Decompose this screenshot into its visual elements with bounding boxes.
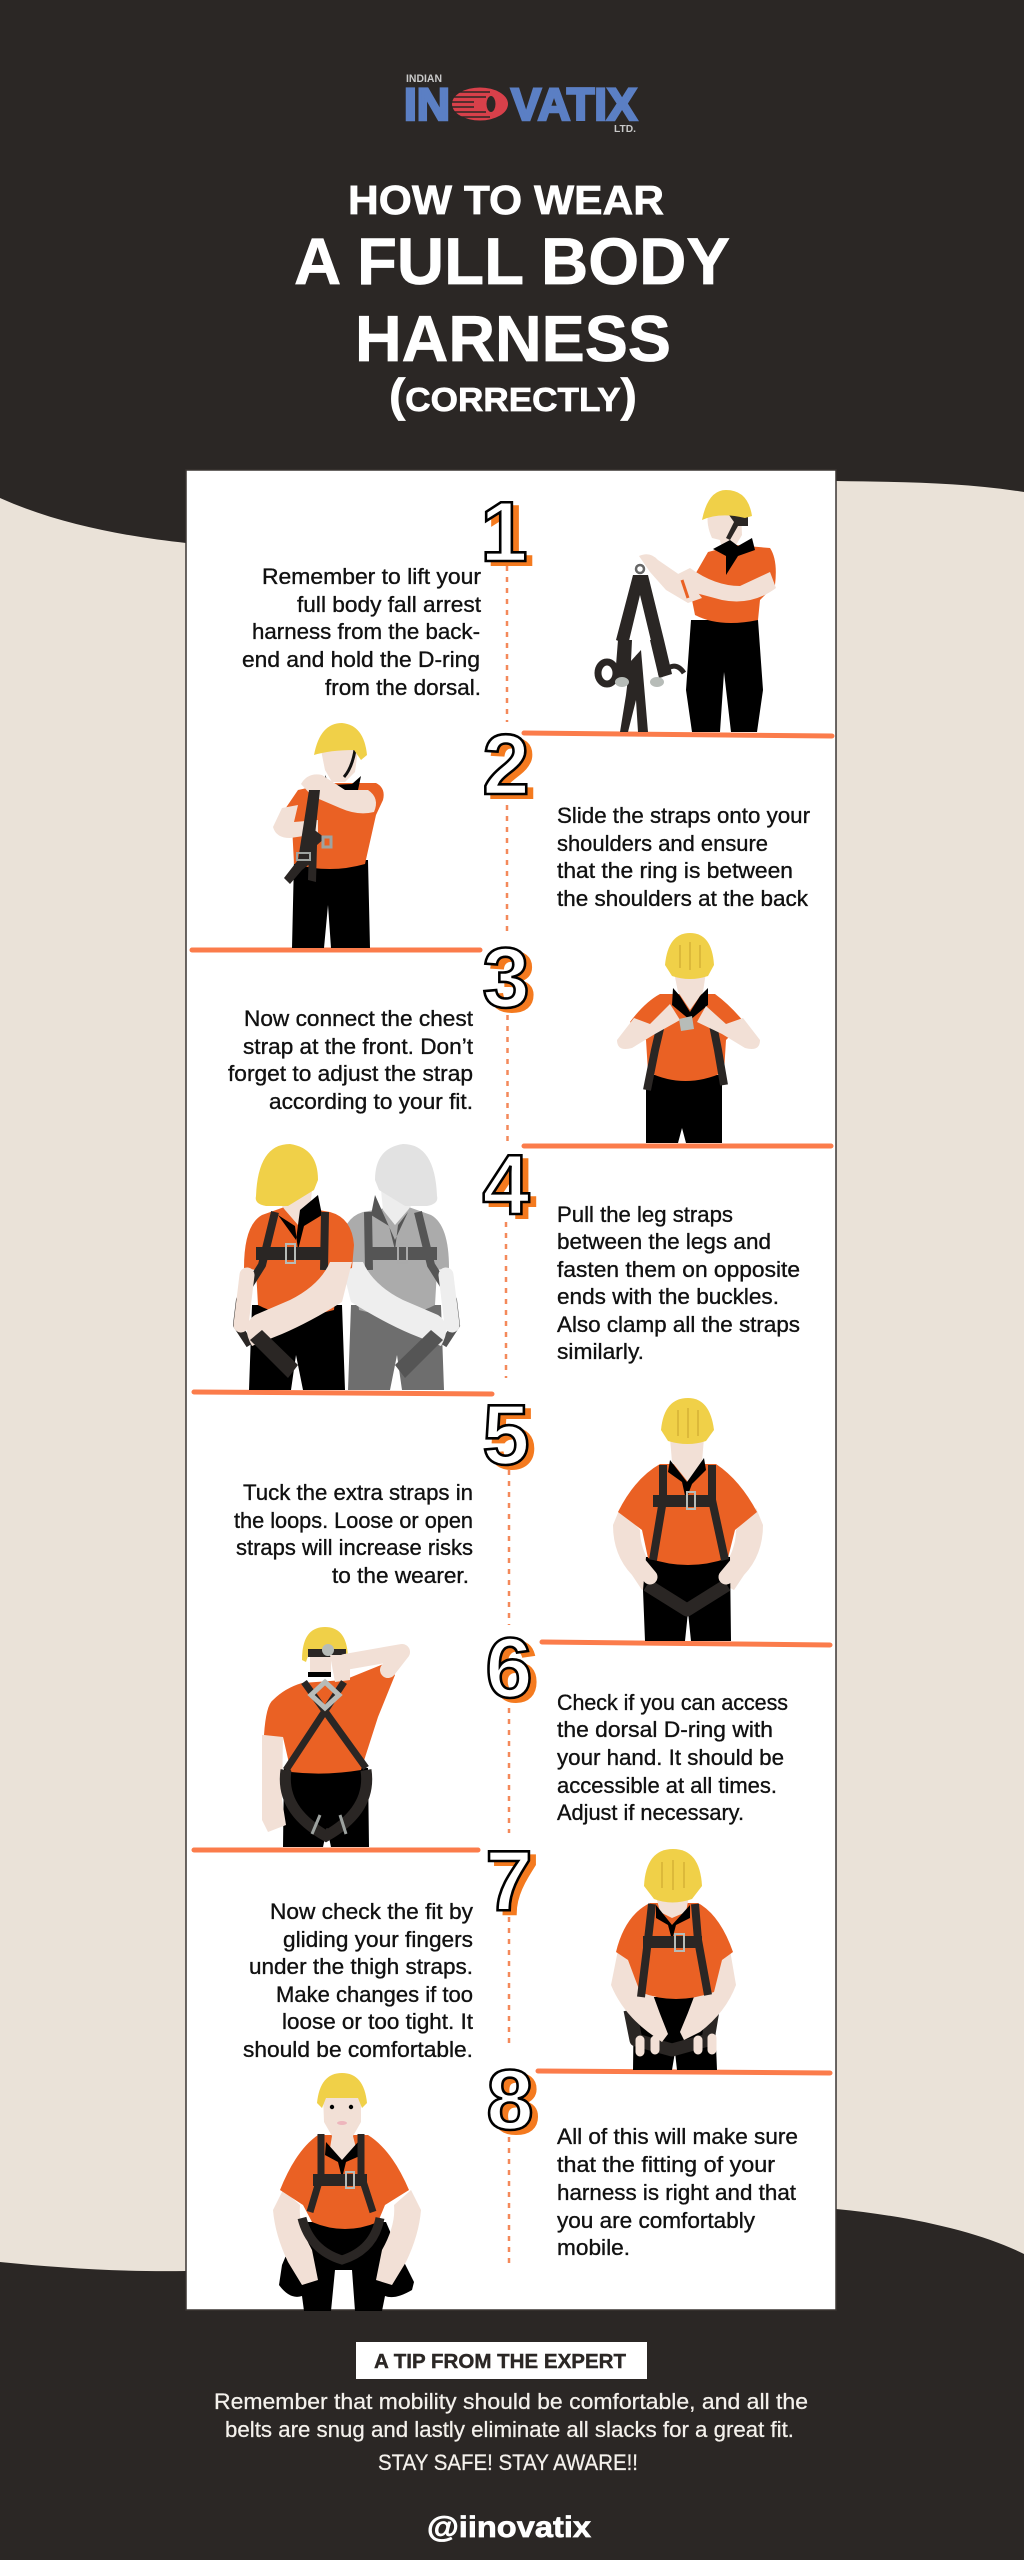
step 4 text: ends with the buckles. — [557, 1284, 779, 1309]
step 2 text: that the ring is between — [557, 858, 793, 883]
step 4 text: between the legs and — [557, 1229, 771, 1254]
title: HARNESS — [355, 302, 671, 375]
step 4 text: similarly. — [557, 1339, 644, 1364]
dividers: orange lines and dotted centre line — [192, 566, 832, 2263]
step 5 text: straps will increase risks — [236, 1535, 473, 1560]
step 5 figure: worker tucking straps — [613, 1398, 763, 1641]
title — [294, 177, 730, 421]
step 6 number: 6 — [485, 1621, 533, 1716]
step 2 text: the shoulders at the back — [557, 886, 809, 911]
step 7 text: under the thigh straps. — [249, 1954, 473, 1979]
step 8 number: 8 — [492, 2057, 540, 2152]
step 7 number: 7 — [485, 1834, 533, 1929]
step 4 text: fasten them on opposite — [557, 1257, 800, 1282]
step 8 text — [557, 2124, 798, 2260]
step 6 text — [557, 1690, 788, 1825]
step 5 text: the loops. Loose or open — [234, 1508, 473, 1533]
step 6 figure: worker reaching dorsal D-ring, back view — [262, 1627, 402, 1847]
step 3 text: forget to adjust the strap — [228, 1061, 473, 1086]
step 5 text: Tuck the extra straps in — [243, 1480, 473, 1505]
step 1 figure: worker lifting harness — [598, 490, 776, 732]
step 2 number: 2 — [488, 722, 536, 817]
tip text: STAY SAFE! STAY AWARE!! — [378, 2450, 638, 2475]
logo: Indian Inovatix Ltd: IN — [404, 79, 450, 130]
step 7 text: Now check the fit by — [270, 1899, 473, 1924]
step 3 number: 3 — [482, 931, 530, 1026]
step 7 number: 7 — [491, 1838, 539, 1933]
title: A FULL BODY — [294, 224, 730, 298]
step 8 text: you are comfortably — [557, 2208, 755, 2233]
title: (CORRECTLY ) — [389, 369, 637, 421]
step 6 text: your hand. It should be — [557, 1745, 784, 1770]
step 2 figure: worker sliding straps over shoulders — [273, 723, 384, 948]
step 5 text: to the wearer. — [332, 1563, 469, 1588]
logo: Indian Inovatix Ltd: VATIX — [511, 79, 637, 130]
step 1 text: from the dorsal. — [325, 675, 481, 700]
grey figure (mirrored) — [341, 1144, 456, 1390]
step 5 text — [234, 1480, 473, 1588]
step 3 text: Now connect the chest — [244, 1006, 473, 1031]
step 7 figure: worker checking thigh straps — [611, 1849, 736, 2070]
step 5 number: 5 — [482, 1388, 530, 1483]
panel: steps — [186, 470, 836, 2311]
step 7 text: gliding your fingers — [283, 1927, 473, 1952]
step 7 text: Make changes if too — [276, 1982, 473, 2007]
step 6 text: Adjust if necessary. — [557, 1800, 744, 1825]
logo: Indian Inovatix Ltd: INDIAN — [406, 73, 442, 85]
step 4 text: Also clamp all the straps — [557, 1312, 800, 1337]
tip text: Remember that mobility should be comfortable, and all the — [214, 2389, 808, 2414]
step 5 number: 5 — [488, 1392, 536, 1487]
step 8 number: 8 — [486, 2053, 534, 2148]
step 8 text: All of this will make sure — [557, 2124, 798, 2149]
callout: tip from the expert: A TIP FROM THE EXPERT — [374, 2351, 626, 2373]
title: HOW TO WEAR — [348, 177, 664, 223]
step 6 text: the dorsal D-ring with — [557, 1717, 773, 1742]
step 4 text: Pull the leg straps — [557, 1202, 733, 1227]
step 2 text: Slide the straps onto your — [557, 803, 810, 828]
step 1 number: 1 — [486, 489, 534, 584]
step 4 number: 4 — [488, 1142, 536, 1237]
step 8 text: that the fitting of your — [557, 2152, 775, 2177]
step 4 figure: worker pulling leg straps, with grey ghost behind — [237, 1144, 456, 1390]
step 1 text: Remember to lift your — [262, 564, 481, 589]
step 6 text: Check if you can access — [557, 1690, 788, 1715]
step 3 text: according to your fit. — [269, 1089, 473, 1114]
step 1 text: harness from the back- — [252, 619, 480, 644]
logo: Indian Inovatix Ltd — [404, 73, 637, 135]
callout: tip from the expert — [356, 2342, 647, 2379]
step 6 text: accessible at all times. — [557, 1773, 777, 1798]
step 7 text — [243, 1899, 473, 2062]
step 2 text — [557, 803, 810, 911]
step 3 text — [228, 1006, 473, 1114]
step 3 figure: worker connecting chest strap — [617, 933, 760, 1143]
step 8 text: harness is right and that — [557, 2180, 796, 2205]
step 2 number: 2 — [482, 718, 530, 813]
step 8 figure: worker squatting to test mobility — [273, 2073, 421, 2311]
tip text — [214, 2389, 808, 2475]
step 7 text: loose or too tight. It — [282, 2009, 473, 2034]
orange figure — [237, 1144, 354, 1390]
logo: Indian Inovatix Ltd: LTD. — [614, 124, 636, 135]
step 1 text: full body fall arrest — [297, 592, 481, 617]
step 3 number: 3 — [488, 935, 536, 1030]
step 1 text: end and hold the D-ring — [242, 647, 480, 672]
tip text: belts are snug and lastly eliminate all slacks for a great fit. — [225, 2417, 794, 2442]
step 1 text — [242, 564, 481, 700]
step 1 number: 1 — [480, 485, 528, 580]
step 2 text: shoulders and ensure — [557, 831, 768, 856]
step 7 text: should be comfortable. — [243, 2037, 473, 2062]
step 8 text: mobile. — [557, 2235, 630, 2260]
step 3 text: strap at the front. Don’t — [243, 1034, 473, 1059]
step 4 number: 4 — [482, 1138, 530, 1233]
step 4 text — [557, 1202, 800, 1364]
step 6 number: 6 — [491, 1625, 539, 1720]
social handle: @iinovatix — [427, 2511, 591, 2544]
